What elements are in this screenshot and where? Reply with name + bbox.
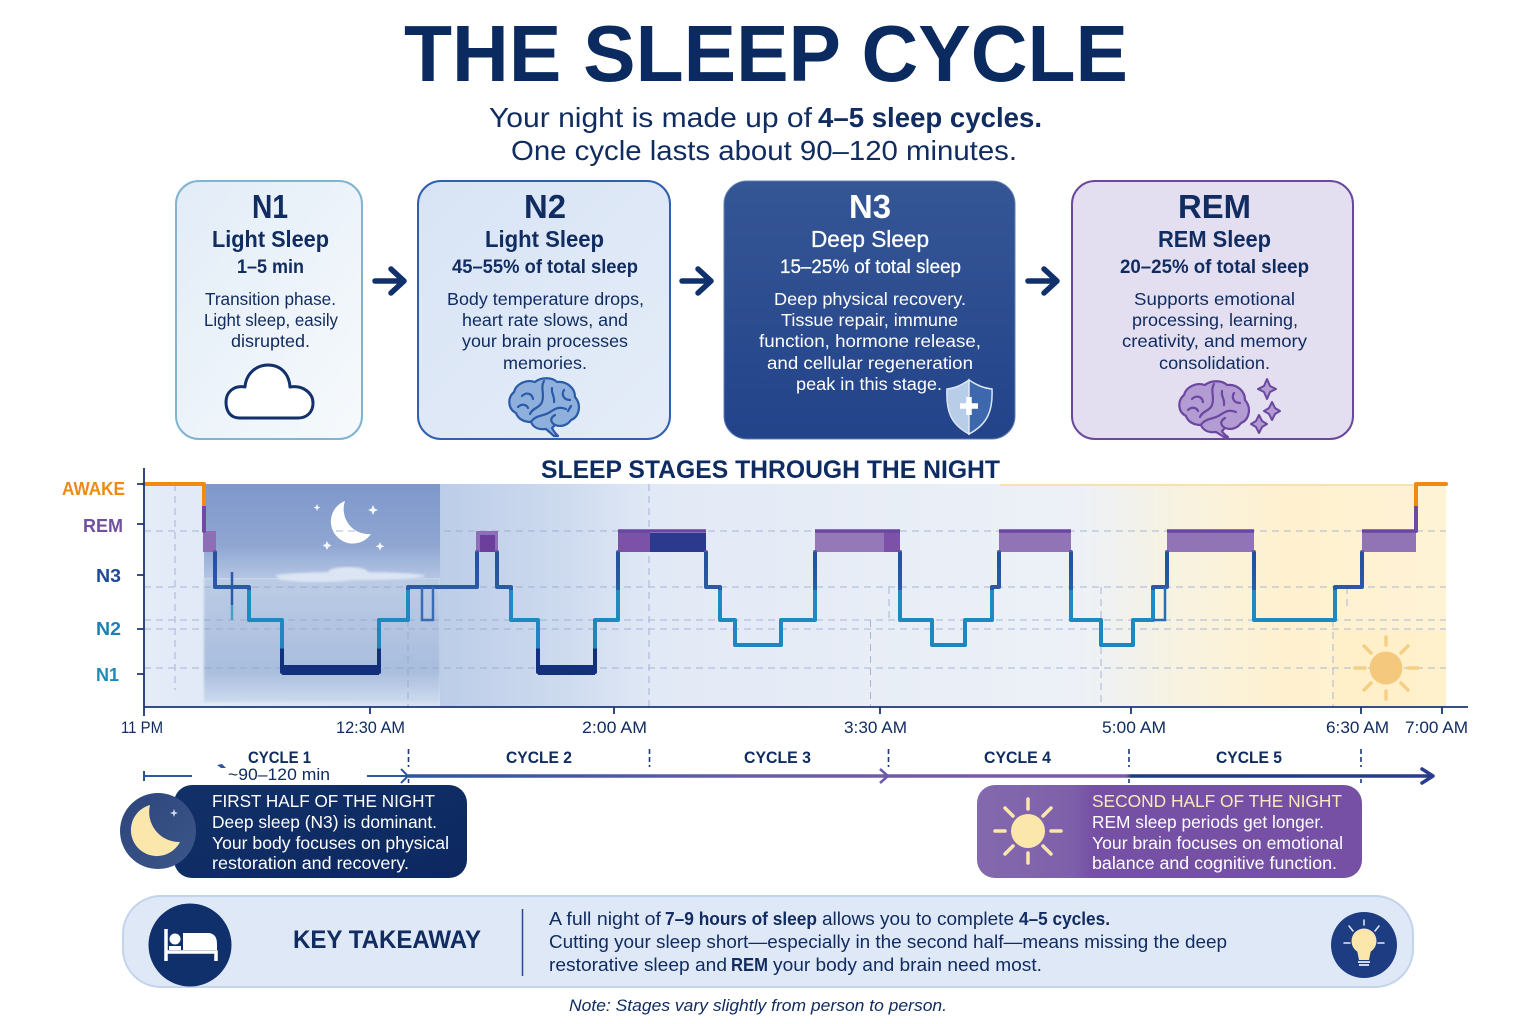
arrow: N1 to N2: [375, 269, 404, 293]
sleep stage step line: [144, 484, 1446, 672]
subtitle: Your night is made up of: [489, 102, 812, 133]
timeline: cycles: ~90–120 min: [228, 765, 330, 784]
chart: sleep stages hypnogram: [62, 468, 1468, 737]
panel: N3 card: function, hormone release,: [759, 331, 981, 351]
subtitle: One cycle lasts about 90–120 minutes.: [511, 135, 1017, 166]
callout: second half of the night: [977, 785, 1362, 878]
panel: REM card: REM Sleep: [1158, 226, 1271, 252]
subtitle: 4–5 sleep cycles.: [818, 102, 1042, 133]
panel: key takeaway: REM: [731, 954, 768, 975]
panel: key takeaway: your body and brain need most.: [773, 954, 1042, 975]
callout: second half of the night: Your brain focuses on emotional: [1092, 833, 1343, 853]
panel: key takeaway: KEY TAKEAWAY: [293, 926, 481, 954]
icon: brain with sparkles: [1179, 379, 1280, 437]
panel: N2 card: [418, 181, 670, 439]
x axis labels: 2:00 AM: [582, 719, 647, 737]
panel: REM card: consolidation.: [1159, 353, 1270, 373]
callout: first half of the night: restoration and recovery.: [212, 853, 409, 873]
moon and clouds: [275, 501, 425, 582]
panel: N2 card: N2: [524, 188, 566, 225]
panel: REM card: [1072, 181, 1353, 439]
panel: N1 card: 1–5 min: [237, 257, 304, 278]
panel: N1 card: disrupted.: [231, 331, 310, 351]
panel: N3 card: Deep physical recovery.: [774, 289, 966, 309]
x axis labels: 12:30 AM: [336, 719, 405, 737]
panel: N2 card: memories.: [503, 353, 587, 373]
panel: N1 card: Transition phase.: [205, 289, 336, 309]
callout: first half of the night: Deep sleep (N3) is dominant.: [212, 812, 437, 832]
timeline: cycles: CYCLE 5: [1216, 749, 1282, 767]
x axis labels: 5:00 AM: [1102, 719, 1166, 737]
panel: N3 card: N3: [849, 188, 891, 225]
panel: N1 card: Light sleep, easily: [204, 310, 338, 330]
y axis labels: N1: [96, 665, 119, 685]
timeline: cycles: CYCLE 2: [506, 749, 572, 767]
callout: second half of the night: SECOND HALF OF THE NIGHT: [1092, 791, 1342, 811]
panel: key takeaway: [123, 896, 1413, 987]
icon: light bulb: [1331, 912, 1397, 978]
timeline: cycles: CYCLE 4: [984, 749, 1052, 767]
timeline: cycles: CYCLE 3: [744, 749, 811, 767]
icon: moon badge: [120, 793, 196, 869]
x axis labels: 7:00 AM: [1405, 719, 1468, 737]
panel: N1 card: [176, 181, 362, 439]
arrow: N3 to REM: [1028, 269, 1057, 293]
panel: N1 card: Light Sleep: [212, 226, 329, 252]
icon: shield: [947, 380, 992, 434]
x axis labels: 11 PM: [121, 719, 163, 737]
x axis labels: 6:30 AM: [1326, 719, 1389, 737]
step line details: [232, 572, 1165, 670]
panel: key takeaway: restorative sleep and: [549, 954, 727, 975]
x axis labels: [121, 719, 1468, 737]
chart background: [144, 484, 1446, 707]
x axis labels: 3:30 AM: [844, 719, 907, 737]
panel: key takeaway: 4–5 cycles.: [1019, 908, 1110, 929]
grid lines: [144, 484, 1446, 707]
panel: REM card: REM: [1178, 188, 1251, 225]
panel: REM card: Supports emotional: [1134, 289, 1295, 309]
panel: N2 card: heart rate slows, and: [462, 310, 628, 330]
y axis labels: REM: [83, 516, 123, 536]
callout: first half of the night: [120, 785, 467, 878]
panel: N2 card: Light Sleep: [485, 226, 604, 252]
panel: REM card: 20–25% of total sleep: [1120, 257, 1309, 278]
panel: key takeaway: A full night of: [549, 908, 662, 929]
panel: N3 card: 15–25% of total sleep: [780, 257, 961, 278]
panel: N2 card: your brain processes: [462, 331, 628, 351]
panel: N2 card: Body temperature drops,: [447, 289, 644, 309]
axes: [137, 468, 1468, 716]
panel: N3 card: and cellular regeneration: [767, 353, 973, 373]
y axis labels: [62, 479, 125, 685]
subtitle: [489, 102, 1042, 166]
panel: key takeaway: allows you to complete: [822, 908, 1014, 929]
panel: N3 card: Tissue repair, immune: [781, 310, 958, 330]
panel: N1 card: N1: [252, 188, 288, 225]
panel: N2 card: 45–55% of total sleep: [452, 257, 638, 278]
panel: key takeaway: Cutting your sleep short—especially in the second half—means missing the deep: [549, 931, 1227, 952]
arrow: N2 to N3: [682, 269, 711, 293]
panel: key takeaway: 7–9 hours of sleep: [665, 908, 817, 929]
icon: cloud: [226, 365, 313, 418]
y axis labels: N2: [96, 619, 121, 639]
callout: second half of the night: balance and cognitive function.: [1092, 853, 1337, 873]
timeline: cycles: CYCLE 1: [248, 749, 311, 767]
icon: bed: [148, 904, 232, 986]
panel: REM card: creativity, and memory: [1122, 331, 1307, 351]
callout: second half of the night: REM sleep periods get longer.: [1092, 812, 1324, 832]
panel: REM card: processing, learning,: [1132, 310, 1298, 330]
icon: sun in chart: [1355, 637, 1418, 699]
REM blocks: [203, 531, 1416, 552]
title: THE SLEEP CYCLE: [404, 9, 1128, 98]
icon: brain: [509, 378, 579, 436]
heading: chart title: SLEEP STAGES THROUGH THE NIGHT: [541, 456, 1000, 484]
panel: N3 card: peak in this stage.: [796, 374, 942, 394]
y axis labels: AWAKE: [62, 479, 125, 499]
callout: first half of the night: FIRST HALF OF THE NIGHT: [212, 791, 435, 811]
y axis labels: N3: [96, 566, 121, 586]
icon: sun badge: [995, 799, 1061, 863]
note: Note: Stages vary slightly from person to person.: [569, 997, 947, 1015]
callout: first half of the night: Your body focuses on physical: [212, 833, 449, 853]
panel: N3 card: Deep Sleep: [811, 226, 929, 252]
timeline: cycles: [144, 749, 1433, 784]
panel: N3 card: [724, 181, 1015, 439]
